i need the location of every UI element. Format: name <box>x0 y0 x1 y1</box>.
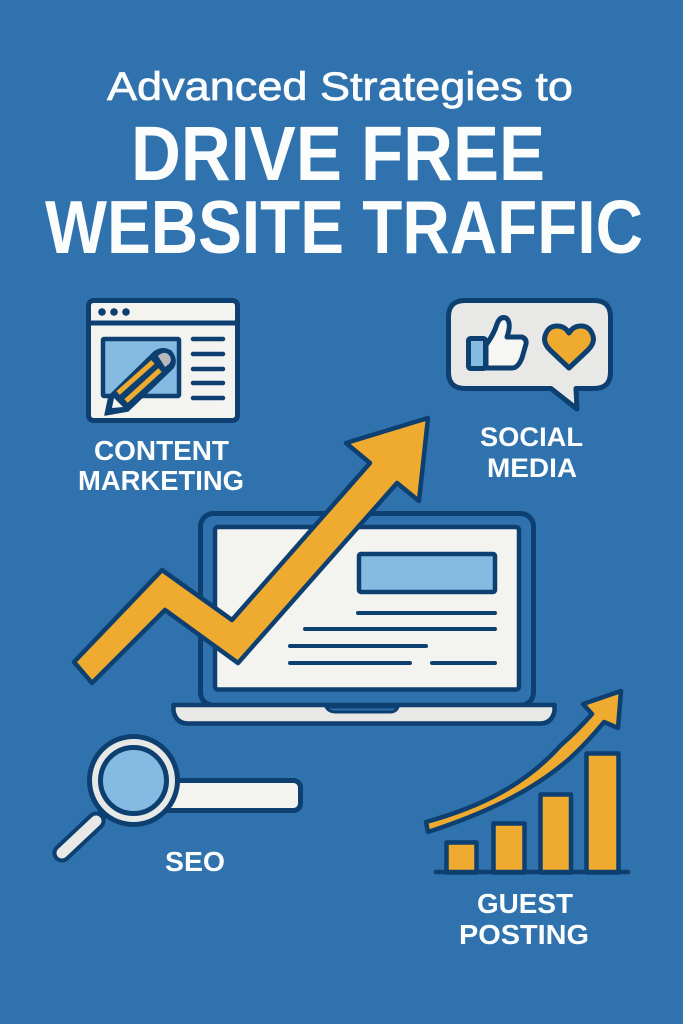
label: guest posting: GUEST <box>477 888 573 919</box>
magnifier lens <box>90 736 178 824</box>
label: guest posting <box>459 888 589 950</box>
label: content marketing: CONTENT <box>94 435 229 466</box>
icon: pencil <box>105 349 175 415</box>
icon: social media speech bubble <box>448 300 610 409</box>
title line: subtitle: Advanced Strategies to <box>107 65 573 109</box>
curved arrow <box>426 691 621 832</box>
icon: thumbs up <box>468 318 526 368</box>
magnifier handle <box>62 813 104 853</box>
growth arrow <box>74 418 428 683</box>
title <box>45 65 643 269</box>
label: social media <box>480 422 583 483</box>
label: social media: MEDIA <box>487 453 577 483</box>
laptop base <box>174 705 554 724</box>
label: seo: SEO <box>165 846 225 877</box>
label: content marketing: MARKETING <box>78 465 244 496</box>
label: content marketing <box>78 435 244 496</box>
title line: drive free: DRIVE FREE <box>131 111 545 197</box>
baseline <box>436 870 628 874</box>
icon: heart <box>545 326 593 368</box>
laptop <box>174 514 554 724</box>
bars <box>446 754 618 872</box>
screen banner <box>359 554 495 592</box>
screen text lines <box>290 613 495 663</box>
icon: seo search bar and magnifier <box>62 736 300 853</box>
laptop lid <box>200 514 534 706</box>
laptop screen <box>215 527 519 690</box>
search bar <box>150 780 300 810</box>
icon: guest posting bar chart <box>426 691 628 872</box>
icon: content marketing browser window <box>88 300 238 420</box>
label: guest posting: POSTING <box>459 919 589 950</box>
label: social media: SOCIAL <box>480 422 583 452</box>
